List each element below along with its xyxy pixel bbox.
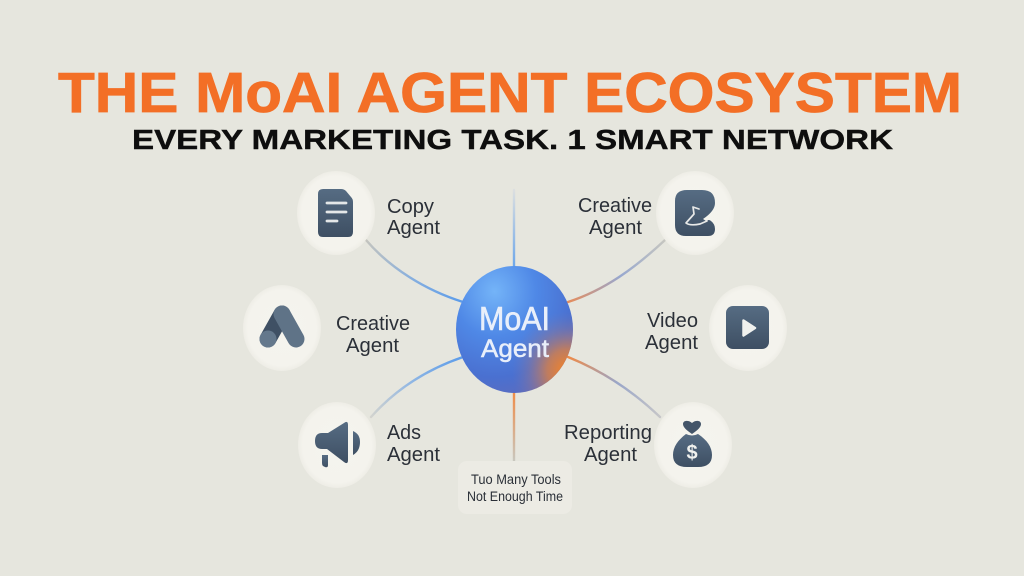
label: Video [647,310,698,332]
connector: ads agent to hub [371,357,463,417]
node: Ads Agent [298,402,440,488]
connector lines [366,190,665,461]
hub label: MoAI [479,300,550,337]
icon disc [656,171,734,255]
hub sublabel: Agent [481,335,549,363]
icon disc [709,285,787,371]
icon: play [726,306,769,349]
label: Creative [336,313,410,335]
central hub: MoAI Agent [456,266,573,393]
node: Video Agent [645,285,787,371]
connector: bottom spoke to callout [513,392,515,461]
connector: top spoke [513,190,515,267]
label line 2: Agent [346,335,399,357]
connector: creative agent right to hub [568,240,665,302]
dollar sign: $ [686,442,698,464]
connector: copy agent to hub [366,240,463,302]
node: Creative Agent (left) [243,285,410,371]
node: Reporting Agent [564,402,732,488]
label line 2: Agent [387,217,440,239]
subtitle: EVERY MARKETING TASK. 1 SMART NETWORK [132,124,893,155]
node: Copy Agent [297,171,440,255]
callout line 2: Not Enough Time [467,489,563,504]
node: Creative Agent (right) [578,171,734,255]
icon disc [297,171,375,255]
icon: megaphone [315,422,360,467]
title: THE MoAI AGENT ECOSYSTEM [58,61,962,125]
icon: ads triangle [260,314,296,348]
label line 2: Agent [589,217,642,239]
label line 2: Agent [387,444,440,466]
icon: money bag [673,421,712,467]
label: Reporting [564,422,652,444]
callout line 1: Tuo Many Tools [471,471,561,487]
icon: pen badge [675,190,715,236]
icon disc [654,402,732,488]
connector: reporting agent to hub [568,357,660,417]
icon disc [243,285,321,371]
label line 2: Agent [584,444,637,466]
icon: document [318,189,353,237]
label: Creative [578,195,652,217]
label: Ads [387,422,421,444]
icon disc [298,402,376,488]
label: Copy [387,196,434,218]
callout: too many tools [458,461,572,514]
label line 2: Agent [645,332,698,354]
